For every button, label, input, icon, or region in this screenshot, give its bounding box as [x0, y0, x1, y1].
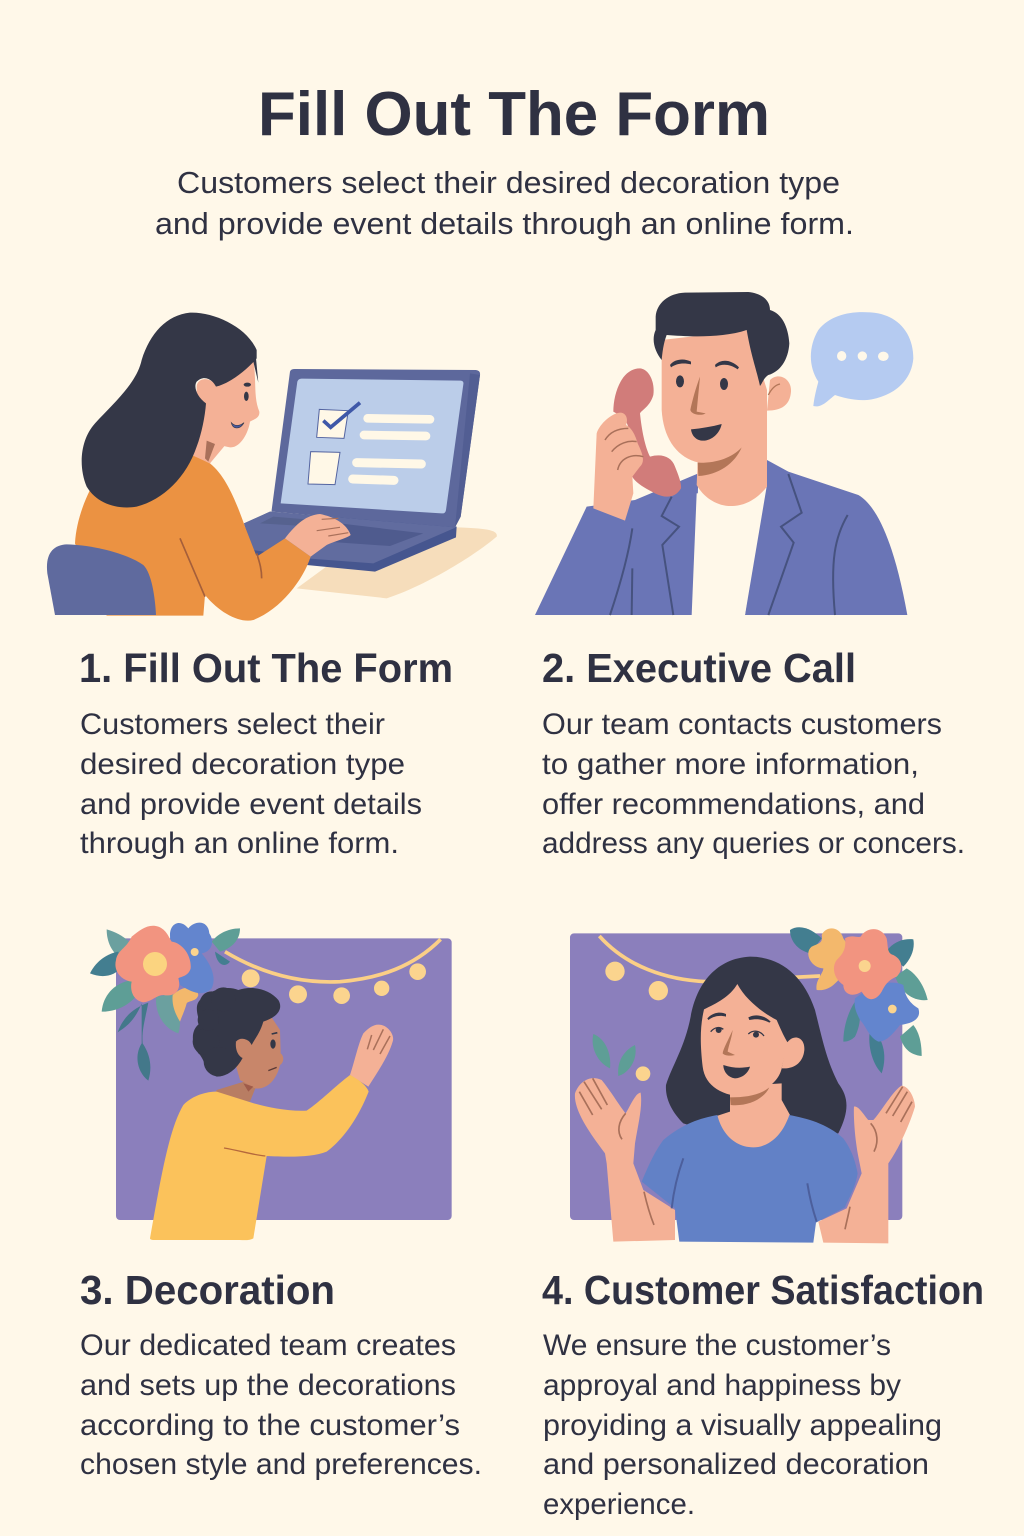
body text: Our dedicated team creates: [80, 1329, 456, 1362]
panel: step 4 customer satisfaction: [542, 927, 984, 1521]
body text: [80, 1329, 482, 1481]
body text: approyal and happiness by: [543, 1369, 901, 1402]
panel: step 2 executive call: [535, 292, 965, 860]
body text: experience.: [543, 1488, 695, 1521]
body text: [80, 708, 422, 860]
body text: and personalized decoration: [543, 1448, 929, 1481]
heading: 1. Fill Out The Form: [79, 645, 453, 691]
illustration: happy customer: [570, 927, 928, 1243]
body text: Our team contacts customers: [542, 708, 942, 741]
title: Fill Out The Form: [258, 80, 770, 149]
illustration: woman at laptop: [47, 313, 497, 621]
body text: and provide event details: [80, 788, 422, 821]
body text: [543, 1329, 942, 1521]
subtitle: Customers select their desired decoration type: [177, 165, 840, 200]
body text: and sets up the decorations: [80, 1369, 456, 1402]
body text: desired decoration type: [80, 748, 405, 781]
body text: to gather more information,: [542, 748, 919, 781]
icon: phone handset: [613, 368, 681, 497]
heading: 3. Decoration: [80, 1267, 335, 1313]
subtitle: and provide event details through an online form.: [155, 206, 854, 241]
subtitle: [155, 165, 854, 241]
body text: according to the customer’s: [80, 1409, 460, 1442]
body text: We ensure the customer’s: [543, 1329, 891, 1362]
body text: address any queries or concers.: [542, 827, 965, 860]
heading: 4. Customer Satisfaction: [542, 1267, 984, 1313]
icon: speech bubble: [811, 312, 913, 406]
body text: offer recommendations, and: [542, 788, 925, 821]
body text: proyiding a visually appealing: [543, 1409, 942, 1442]
body text: through an online form.: [80, 827, 399, 860]
body text: chosen style and preferences.: [80, 1448, 482, 1481]
panel: step 3 decoration: [80, 923, 482, 1481]
illustration: man on phone: [535, 292, 913, 615]
body text: Customers select their: [80, 708, 385, 741]
icon: flowers: [790, 927, 928, 1073]
icon: flowers: [90, 923, 240, 1081]
body text: [542, 708, 965, 860]
heading: 2. Executive Call: [542, 645, 856, 691]
panel: step 1 fill out the form: [47, 313, 497, 860]
illustration: person hanging decorations: [90, 923, 452, 1240]
